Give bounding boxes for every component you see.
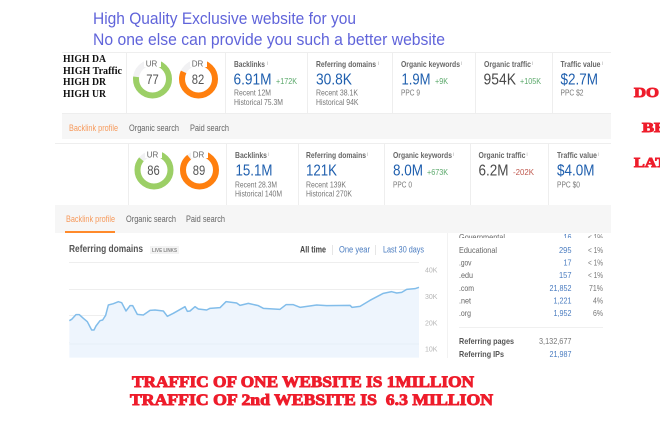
callout: clipped red labels at right edge: DO: [634, 85, 659, 100]
metric: organic keywords: 1.9M: [402, 72, 430, 88]
metric: traffic value: PPC $0: [557, 180, 580, 190]
table: referring domains breakdown: .com: [459, 283, 474, 293]
table: referring domains breakdown: Governmental: [459, 232, 505, 242]
metric: organic keywords: PPC 0: [393, 180, 412, 190]
metric: referring domains: Recent 139K: [306, 180, 346, 190]
table: referring domains breakdown: 1,952: [554, 308, 572, 318]
time range selector: [300, 244, 424, 255]
metric: organic keywords: 8.0M: [393, 162, 423, 180]
metric: organic traffic: Organic traffic: [478, 150, 526, 160]
metric: traffic value: $2.7M: [560, 72, 598, 88]
callout: traffic summary: [130, 374, 493, 409]
gauge: UR 77: UR: [146, 60, 157, 68]
table: referring domains breakdown: 17: [564, 258, 572, 268]
gauge: DR 89: DR: [193, 150, 204, 160]
metric: referring domains: Historical 94K: [316, 97, 359, 107]
gauge: UR 77: [136, 58, 169, 96]
metric: traffic value: Traffic value: [560, 59, 601, 69]
text block: high claims list: HIGH UR: [63, 89, 107, 100]
metric: organic traffic: +105K: [520, 77, 542, 86]
badge: live links: LIVE LINKS: [152, 248, 178, 254]
metric: backlinks: 15.1M: [236, 162, 272, 180]
table: referring domains breakdown: [448, 232, 603, 359]
metric: organic traffic: [484, 59, 542, 88]
metric: backlinks: i: [267, 61, 268, 67]
metric: referring domains: i: [367, 152, 368, 158]
callout: traffic summary: TRAFFIC OF ONE WEBSITE IS 1MILLION: [132, 374, 474, 391]
tabs: second website navigation: [55, 205, 611, 233]
metric: organic keywords: Organic keywords: [401, 59, 460, 69]
y axis labels: 40K: [425, 268, 438, 274]
tabs: first website navigation: Organic search: [129, 123, 179, 133]
table: referring domains breakdown: 157: [559, 270, 572, 280]
metric: organic traffic: i: [526, 152, 528, 158]
y axis labels: 30K: [425, 294, 438, 301]
chart heading: Referring domains: [69, 244, 143, 255]
metric: organic keywords: [393, 150, 454, 190]
metric: referring domains: [316, 59, 379, 107]
callout: traffic summary: TRAFFIC OF 2nd WEBSITE IS 6.3 MILLION: [130, 392, 493, 409]
table: referring domains breakdown: < 1%: [588, 270, 603, 280]
table: referring domains breakdown: 295: [559, 245, 572, 255]
gauge: DR 89: 89: [193, 162, 205, 178]
time range selector: All time: [300, 244, 326, 254]
gauge: UR 86: 86: [147, 162, 160, 178]
text block: high claims list: HIGH DA: [63, 54, 107, 65]
metric: referring domains: Referring domains: [316, 59, 376, 69]
table: referring domains breakdown: < 1%: [588, 232, 603, 242]
metric: organic traffic: -202K: [513, 168, 535, 177]
metric: organic traffic: 954K: [484, 72, 517, 88]
tabs: second website navigation: Organic search: [126, 214, 176, 224]
metric: traffic value: i: [598, 152, 599, 158]
chart: referring domains line chart: [69, 244, 438, 358]
callout: clipped red labels at right edge: LAT: [634, 155, 660, 170]
table: referring domains breakdown: 21,987: [550, 349, 572, 359]
table: referring domains breakdown: 16: [564, 232, 572, 242]
metric: backlinks: [235, 150, 282, 198]
panel: second website metrics: [55, 143, 611, 205]
metric: backlinks: Recent 12M: [234, 88, 271, 98]
text block: high claims list: [63, 54, 123, 100]
gauge: UR 77: 77: [146, 71, 159, 87]
metric: organic keywords: i: [461, 61, 462, 67]
gauge: DR 89: [183, 149, 216, 186]
metric: organic keywords: [401, 59, 462, 98]
table: referring domains breakdown: Referring IPs: [459, 349, 504, 359]
metric: referring domains: Referring domains: [306, 150, 366, 160]
metric: backlinks: Historical 75.3M: [234, 97, 283, 107]
metric: backlinks: Recent 28.3M: [235, 180, 277, 190]
gauge: DR 82: DR: [192, 60, 203, 68]
table: referring domains breakdown: 3,132,677: [539, 336, 572, 346]
metric: backlinks: +172K: [276, 77, 298, 86]
gauge: DR 82: 82: [192, 71, 204, 87]
text block: high claims list: HIGH DR: [63, 77, 107, 88]
callout: clipped red labels at right edge: BE: [642, 120, 660, 135]
y axis labels: 10K: [425, 346, 438, 354]
gauge: UR 86: [138, 149, 170, 186]
gauge: UR 86: UR: [147, 150, 158, 160]
metric: organic keywords: +9K: [435, 77, 449, 86]
callout: clipped red labels at right edge: [634, 85, 660, 170]
metric: backlinks: Backlinks: [234, 59, 265, 69]
metric: backlinks: [234, 59, 298, 107]
metric: traffic value: $4.0M: [557, 162, 594, 180]
gauge: DR 82: [182, 58, 215, 96]
metric: organic traffic: [478, 150, 535, 180]
table: referring domains breakdown: 1,221: [554, 296, 572, 306]
metric: organic keywords: Organic keywords: [393, 150, 452, 160]
title: headline text: No one else can provide you such a better website: [93, 30, 445, 49]
metric: referring domains: 30.8K: [316, 72, 353, 88]
metric: backlinks: Historical 140M: [235, 188, 282, 198]
table: referring domains breakdown: 21,852: [550, 283, 572, 293]
metric: organic keywords: +673K: [427, 168, 449, 177]
y axis labels: 20K: [425, 320, 438, 328]
metric: organic traffic: i: [532, 61, 533, 67]
metric: backlinks: i: [268, 152, 269, 158]
table: referring domains breakdown: Referring pages: [459, 336, 514, 346]
table: referring domains breakdown: .net: [459, 296, 472, 306]
table: referring domains breakdown: Educational: [459, 245, 497, 255]
metric: organic keywords: i: [453, 152, 454, 158]
metric: backlinks: 6.91M: [234, 72, 272, 88]
table: referring domains breakdown: .org: [459, 308, 471, 318]
tabs: second website navigation: Paid search: [186, 214, 225, 224]
metric: referring domains: i: [378, 61, 379, 67]
metric: traffic value: Traffic value: [557, 150, 597, 160]
metric: backlinks: Backlinks: [235, 150, 267, 160]
tabs: first website navigation: Paid search: [190, 123, 229, 133]
metric: organic traffic: 6.2M: [478, 162, 508, 180]
title: headline text: [93, 9, 445, 49]
table: referring domains breakdown: .edu: [459, 270, 473, 280]
metric: organic keywords: PPC 9: [401, 88, 420, 98]
tabs: second website navigation: Backlink profile: [66, 214, 115, 224]
table: referring domains breakdown: 6%: [593, 308, 603, 318]
table: referring domains breakdown: 4%: [593, 296, 603, 306]
tabs: first website navigation: Backlink profile: [69, 123, 118, 133]
time range selector: One year: [339, 244, 370, 254]
time range selector: Last 30 days: [383, 244, 424, 254]
metric: traffic value: [557, 150, 599, 190]
table: referring domains breakdown: < 1%: [588, 258, 603, 268]
title: headline text: High Quality Exclusive website for you: [93, 9, 356, 28]
badge: live links: [150, 246, 179, 254]
tabs: first website navigation: [62, 114, 611, 139]
metric: referring domains: 121K: [306, 162, 338, 180]
metric: traffic value: [560, 59, 603, 98]
metric: organic traffic: Organic traffic: [484, 59, 531, 69]
metric: traffic value: i: [602, 61, 603, 67]
line plot: [69, 286, 420, 358]
table: referring domains breakdown: 71%: [589, 283, 603, 293]
metric: traffic value: PPC $2: [560, 88, 584, 98]
table: referring domains breakdown: < 1%: [588, 245, 603, 255]
table: referring domains breakdown: .gov: [459, 258, 472, 268]
metric: referring domains: Historical 270K: [306, 188, 352, 198]
panel: first website metrics: [62, 52, 611, 114]
text block: high claims list: HIGH Traffic: [63, 66, 123, 77]
metric: referring domains: Recent 38.1K: [316, 88, 358, 98]
metric: referring domains: [306, 150, 368, 198]
y axis labels: [425, 268, 438, 354]
